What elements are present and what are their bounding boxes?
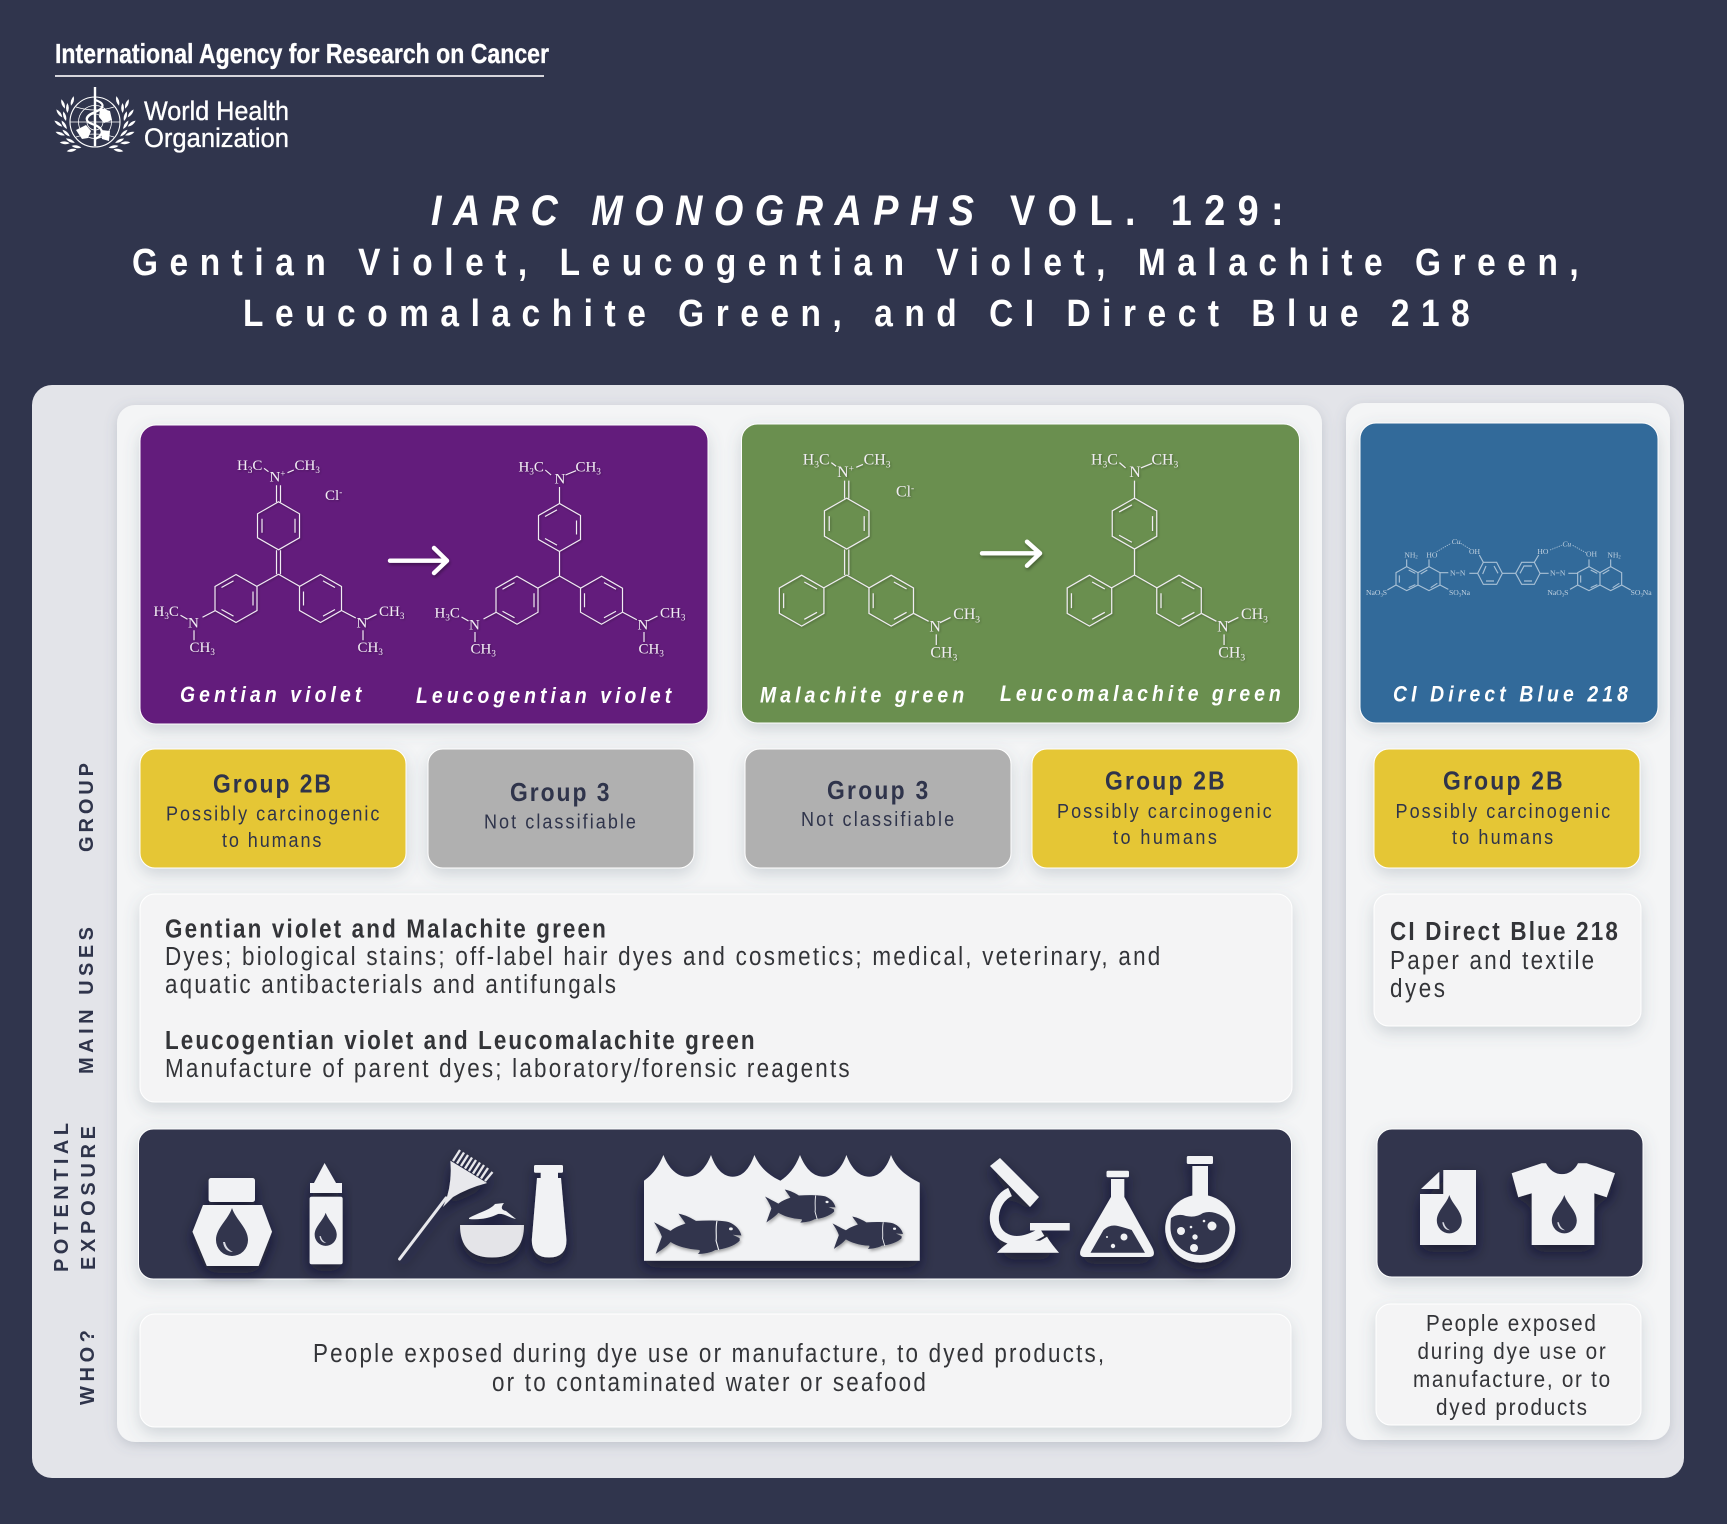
card: who left: People exposed during dye use or manufacture, to dyed products, [313,1340,1104,1368]
icon: dye brush [400,1150,492,1259]
logo: WHO wordmark: Organization [144,123,289,153]
molecule: leucogentian violet: 3 [445,613,450,623]
molecule: CI Direct Blue 218: NaO [1547,588,1562,597]
label: malachite green: Malachite green [760,683,964,708]
icon: dyed paper [1420,1170,1476,1245]
panel: green dyes [742,424,1300,723]
molecule: leucomalachite green: 3 [1263,615,1268,625]
molecule: CI Direct Blue 218: HO [1426,550,1438,559]
title: VOL. 129: [1010,186,1284,235]
logo: WHO emblem [53,87,137,158]
side labels: POTENTIAL [51,1123,73,1272]
card: main uses left: Leucogentian violet and Leucomalachite green [165,1027,755,1055]
molecule: CI Direct Blue 218: HO [1537,547,1549,556]
title: Leucomalachite Green, and CI Direct Blue 218 [243,292,1470,334]
molecule: CI Direct Blue 218: N=N [1450,569,1466,578]
molecule: CI Direct Blue 218: Cu [1452,537,1461,546]
molecule: leucogentian violet: CH [638,642,659,658]
icon: ink bottle [192,1178,272,1266]
molecule: malachite green: 3 [814,461,819,471]
molecule: CI Direct Blue 218: 3 [1562,593,1565,598]
molecule: CI Direct Blue 218: 3 [1459,593,1462,598]
side labels: EXPOSURE [78,1126,100,1270]
arrow [390,548,447,573]
arrow [982,542,1040,566]
molecule: gentian violet [154,458,405,657]
side labels [51,763,100,1405]
panel: right column [1346,403,1670,1440]
molecule: CI Direct Blue 218: S [1383,588,1387,597]
molecule: leucomalachite green: C [1107,451,1118,468]
molecule: leucogentian violet: CH [660,606,681,622]
molecule: gentian violet: CH [190,640,210,656]
title: IARC MONOGRAPHS [431,186,974,235]
molecule: malachite green: H [803,451,814,468]
molecule: gentian violet: 3 [248,465,253,475]
card: who right: manufacture, or to [1413,1366,1610,1392]
card: leucomalachite green group 2B: Possibly carcinogenic [1057,801,1272,823]
molecule: CI Direct Blue 218: NaO [1366,588,1380,597]
molecule: leucomalachite green: N [1217,619,1229,636]
molecule: leucomalachite green: CH [1151,451,1174,468]
molecule: CI Direct Blue 218: Cu [1562,540,1571,549]
molecule: CI Direct Blue 218: Na [1461,588,1471,597]
molecule: CI Direct Blue 218: 2 [1415,556,1418,561]
molecule: leucomalachite green [1067,451,1268,664]
molecule: malachite green: 3 [953,654,958,664]
molecule: CI Direct Blue 218: 2 [1618,556,1621,561]
molecule: leucogentian violet: H [518,460,529,476]
card: leucogentian violet group 3: Group 3 [510,779,609,807]
molecule: gentian violet: 3 [210,647,215,657]
icon: round flask [1165,1156,1235,1263]
molecule: leucogentian violet: H [434,606,445,622]
card: main uses left: aquatic antibacterials and antifungals [165,971,616,999]
card: leucomalachite green group 2B: to humans [1113,827,1217,849]
molecule: leucomalachite green: 3 [1174,461,1179,471]
molecule: leucomalachite green: H [1091,451,1103,468]
side labels: MAIN USES [76,927,98,1074]
panel: purple dyes [140,425,708,724]
molecule: malachite green: 3 [975,615,980,625]
molecule: gentian violet: C [252,458,262,474]
card: CI Direct Blue group 2B [1374,749,1640,868]
molecule: malachite green: - [911,484,914,494]
panel: left main column [117,405,1322,1442]
molecule: gentian violet: - [339,487,342,497]
molecule: CI Direct Blue 218: 3 [1640,593,1643,598]
molecule: gentian violet: CH [294,458,315,474]
molecule: leucomalachite green: 3 [1240,654,1245,664]
molecule: leucogentian violet: 3 [596,467,601,477]
card: malachite green group 3 [745,749,1011,868]
logo: WHO wordmark: World Health [144,96,289,126]
molecule: malachite green: Cl [896,483,911,500]
molecule: leucogentian violet: CH [576,460,596,476]
card: main uses right: Paper and textile [1390,947,1594,975]
molecule: CI Direct Blue 218: Na [1643,588,1652,597]
icon: cosmetic tube [532,1165,566,1258]
title: Gentian Violet, Leucogentian Violet, Malachite Green, [132,241,1579,283]
card: main uses right: dyes [1390,975,1445,1003]
molecule: malachite green: CH [930,644,953,661]
molecule: gentian violet: C [169,604,179,620]
molecule: CI Direct Blue 218: 3 [1380,593,1383,598]
side labels: WHO? [77,1330,99,1405]
icon: conical flask [1080,1171,1154,1257]
label: CI Direct Blue 218: CI Direct Blue 218 [1393,682,1628,707]
card: gentian violet group 2B: to humans [222,830,321,852]
molecule: gentian violet: CH [358,640,378,656]
molecule: CI Direct Blue 218: S [1564,588,1568,597]
molecule: leucogentian violet: N [469,617,480,633]
card: gentian violet group 2B: Possibly carcinogenic [166,804,380,826]
molecule: CI Direct Blue 218: NH [1404,550,1415,559]
icon: dropper bottle [310,1163,343,1264]
molecule: malachite green: N [837,464,849,481]
card: gentian violet group 2B [140,749,406,868]
molecule: leucomalachite green: 3 [1103,461,1108,471]
molecule: malachite green: CH [864,451,886,468]
molecule: leucogentian violet: 3 [681,613,686,623]
card: main uses right: CI Direct Blue 218 [1390,918,1618,946]
molecule: gentian violet: 3 [315,465,320,475]
molecule: malachite green: 3 [886,461,891,471]
molecule: leucogentian violet: 3 [491,649,496,659]
panel: blue dye [1360,423,1658,723]
card: main uses left: Gentian violet and Malachite green [165,915,606,944]
molecule: gentian violet: CH [379,604,400,620]
molecule: leucogentian violet: C [450,606,460,622]
card: CI Direct Blue group 2B: Group 2B [1443,767,1563,796]
card: who right: People exposed [1426,1310,1596,1336]
molecule: CI Direct Blue 218: SO [1449,588,1459,597]
molecule: malachite green: CH [953,606,975,623]
card: who left: or to contaminated water or seafood [492,1369,926,1397]
card: leucomalachite green group 2B: Group 2B [1105,767,1225,796]
molecule: malachite green: C [819,451,830,468]
card: main uses right [1374,894,1641,1026]
logo: WHO wordmark [144,96,289,153]
panel: potential exposure left [138,1129,1292,1279]
header: IARC name: International Agency for Research on Cancer [55,38,549,69]
card: main uses left: Dyes; biological stains; off-label hair dyes and cosmetics; medical, veterinary, and [165,943,1160,971]
card: who right: dyed products [1436,1394,1587,1420]
card: malachite green group 3: Group 3 [827,777,928,805]
molecule: leucomalachite green: N [1129,464,1141,481]
panel: potential exposure right [1377,1129,1643,1277]
molecule: gentian violet: 3 [378,647,383,657]
icon: dye bowl [460,1203,524,1258]
molecule: leucogentian violet: CH [470,642,491,658]
molecule: leucogentian violet: C [534,460,544,476]
molecule: CI Direct Blue 218: SO [1631,588,1640,597]
molecule: malachite green: + [849,465,854,475]
molecule: leucomalachite green: CH [1218,644,1240,661]
molecule: gentian violet: N [270,470,280,486]
molecule: gentian violet: + [280,469,285,479]
icon: microscope [990,1158,1070,1253]
card: leucogentian violet group 3 [428,749,694,868]
molecule: gentian violet: N [188,616,199,632]
molecule: gentian violet: H [237,458,248,474]
molecule: malachite green: N [929,619,941,636]
molecule: leucogentian violet: N [638,617,648,633]
side labels: GROUP [76,763,98,852]
card: gentian violet group 2B: Group 2B [213,770,331,799]
molecule: CI Direct Blue 218 [1366,537,1652,598]
icon: dyed t-shirt [1512,1163,1615,1245]
molecule: gentian violet: Cl [325,488,339,504]
card: leucogentian violet group 3: Not classifiable [484,812,636,834]
molecule: CI Direct Blue 218: OH [1586,550,1598,559]
card: CI Direct Blue group 2B: Possibly carcinogenic [1396,801,1611,823]
label: leucogentian violet: Leucogentian violet [416,684,672,708]
molecule: leucogentian violet: 3 [659,649,664,659]
title [132,186,1579,334]
card: leucomalachite green group 2B [1032,749,1298,868]
molecule: leucogentian violet: N [554,471,566,487]
molecule: CI Direct Blue 218: NH [1607,550,1618,559]
molecule: gentian violet: 3 [400,611,405,621]
molecule: gentian violet: 3 [164,611,169,621]
card: main uses left: Manufacture of parent dyes; laboratory/forensic reagents [165,1055,850,1083]
molecule: leucogentian violet: 3 [529,467,534,477]
card: who right [1376,1304,1641,1425]
card: main uses left [140,894,1292,1102]
molecule: CI Direct Blue 218: N=N [1550,569,1566,578]
card: who left [140,1314,1291,1427]
card: CI Direct Blue group 2B: to humans [1452,827,1553,849]
label: leucomalachite green: Leucomalachite green [1000,682,1281,706]
molecule: leucomalachite green: CH [1241,606,1263,623]
molecule: malachite green [779,451,980,664]
molecule: gentian violet: H [154,604,164,620]
molecule: CI Direct Blue 218: OH [1469,547,1481,556]
icon: fish [654,1190,903,1254]
card: malachite green group 3: Not classifiable [801,809,954,831]
icon: water with fish [644,1155,920,1261]
label: gentian violet: Gentian violet [180,683,362,707]
card: who right: during dye use or [1418,1338,1606,1364]
panel: outer background [32,385,1684,1478]
molecule: leucogentian violet [434,460,686,659]
molecule: gentian violet: N [356,616,368,632]
